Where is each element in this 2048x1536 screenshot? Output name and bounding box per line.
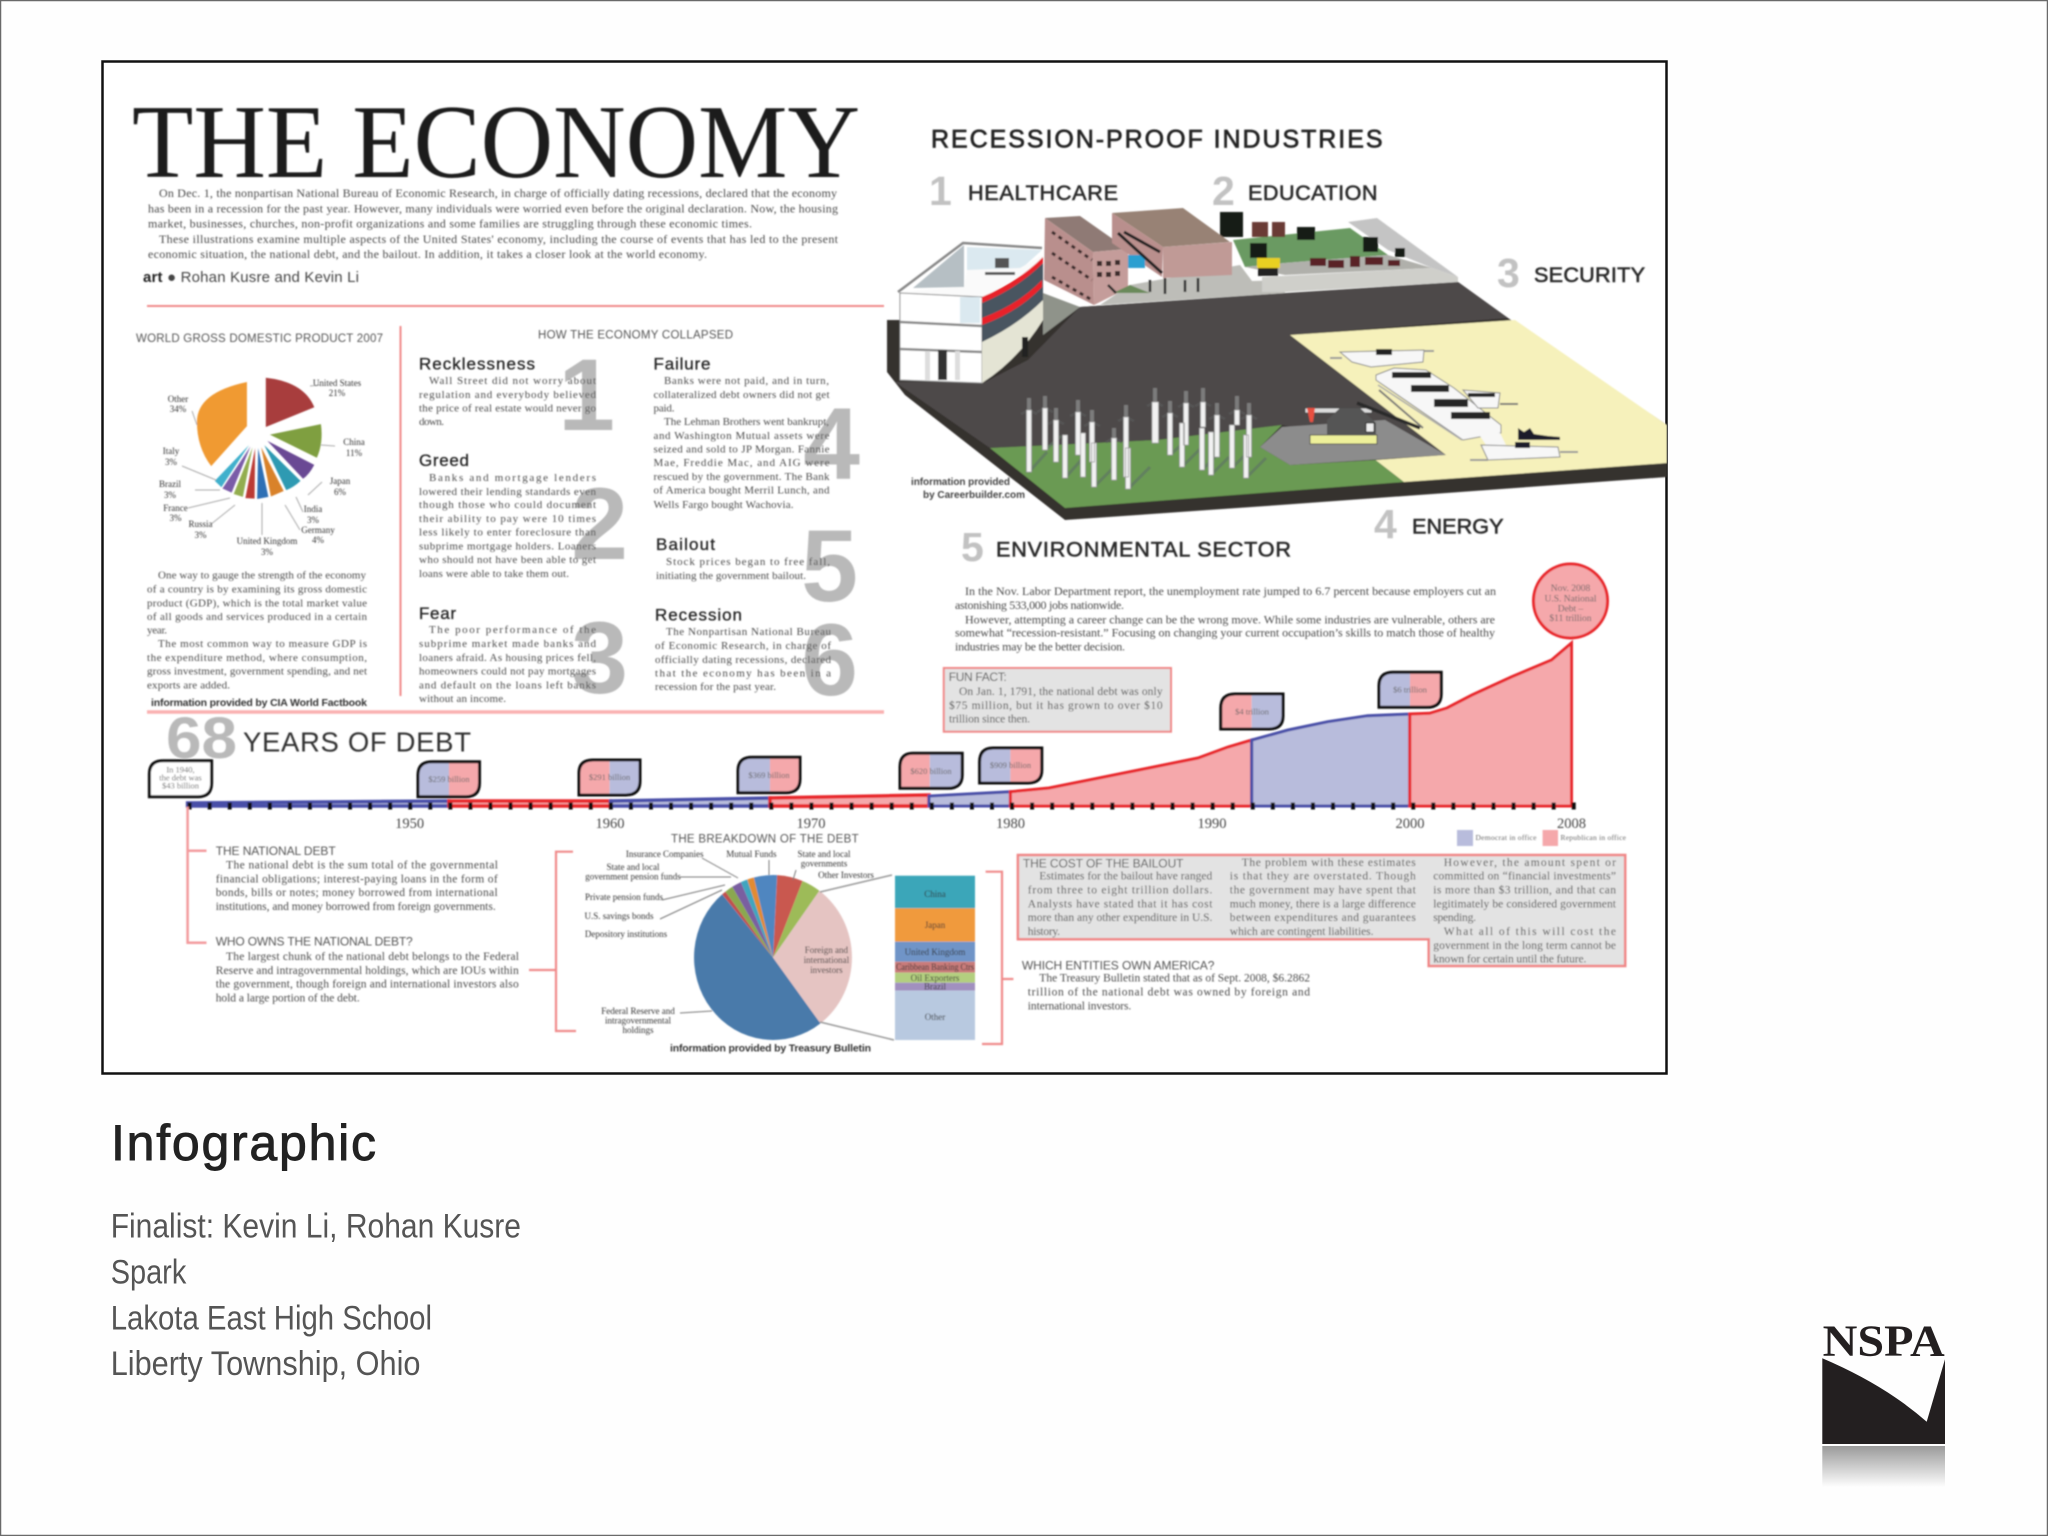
- step 2: greed: subprime mortgage holders. Loaners: [419, 540, 596, 552]
- which entities text: international investors.: [1028, 1000, 1131, 1012]
- callout: 1980: [980, 748, 1042, 783]
- step 2: greed: Banks and mortgage lenders: [429, 472, 596, 484]
- step 4: failure: of America bought Merril Lunch, and: [654, 484, 830, 496]
- bar labels: Caribbean Banking Ctrs: [896, 962, 974, 972]
- pie labels: France: [163, 503, 188, 513]
- bailout box: [1018, 855, 1625, 966]
- step 5: bailout: Stock prices began to free fall,: [666, 556, 830, 568]
- poster frame: [102, 62, 1666, 1074]
- debt pie labels: Mutual Funds: [726, 849, 777, 859]
- debt pie labels: holdings: [622, 1025, 654, 1035]
- large step numbers: [558, 338, 860, 717]
- step 3: fear: and default on the loans left banks: [419, 679, 596, 691]
- bailout column 3: is more than $3 trillion, and that can: [1433, 883, 1616, 896]
- gdp text: of a country is by examining its gross domestic: [147, 583, 367, 595]
- debt pie labels: U.S. savings bonds: [584, 911, 654, 921]
- debt pie wedges: [694, 875, 852, 1040]
- turbine heads: [1021, 402, 1257, 442]
- plaza: [1100, 265, 1285, 305]
- caption credits: Spark: [111, 1253, 187, 1291]
- intro text: These illustrations examine multiple aspects of the United States' economy, including the course of events that has led to the present: [159, 232, 839, 246]
- step 4: failure: [654, 354, 830, 511]
- step 1: recklessness: regulation and everybody believed: [419, 389, 596, 401]
- bar labels: [896, 889, 974, 1022]
- bar labels: United Kingdom: [905, 947, 965, 957]
- label: healthcare: [929, 168, 1118, 214]
- axis years: 1970: [796, 816, 826, 832]
- fun fact box: trillion since then.: [949, 714, 1030, 726]
- heading: 68 years of debt: [166, 706, 471, 771]
- unemployment text: [955, 584, 1496, 654]
- step 3: fear: without an income.: [419, 693, 506, 705]
- national debt text: The national debt is the sum total of the governmental: [226, 859, 498, 871]
- step 4: failure: Banks were not paid, and in turn,: [664, 375, 829, 387]
- step 4: failure: Wells Fargo bought Wachovia.: [654, 499, 794, 511]
- second red band: [770, 795, 929, 806]
- legend: Democrat in office: [1476, 833, 1537, 842]
- pie labels: Germany: [301, 525, 335, 535]
- gdp text: of all goods and services produced in a certain: [147, 611, 368, 623]
- callout: 1976: $620 billion: [910, 766, 952, 776]
- concrete pad: [1260, 420, 1446, 465]
- axis years: 2008: [1557, 816, 1586, 832]
- national debt text: financial obligations; interest-paying loans in the form of: [216, 873, 498, 885]
- which entities text: The Treasury Bulletin stated that as of Sept. 2008, $6.2862: [1039, 972, 1310, 985]
- callout: 1940: In 1940,: [166, 765, 195, 775]
- pie labels: 3%: [194, 530, 207, 540]
- unemployment text: astonishing 533,000 jobs nationwide.: [955, 598, 1124, 612]
- step 6: recession: The Nonpartisan National Bureau: [666, 626, 832, 638]
- caribbean segment: [895, 962, 975, 973]
- other segment: [895, 991, 975, 1040]
- early red band: [449, 801, 611, 806]
- step 2: greed: Greed: [419, 451, 469, 470]
- pie chart: world gdp: [159, 378, 365, 557]
- pie labels: 11%: [346, 448, 363, 458]
- step 2: greed: loans were able to take them out.: [419, 568, 569, 580]
- gdp text: exports are added.: [147, 679, 230, 691]
- terrace path: [1245, 255, 1432, 275]
- pie labels: United States: [313, 378, 362, 388]
- caption credits: Finalist: Kevin Li, Rohan Kusre: [111, 1207, 521, 1245]
- ground block: [887, 282, 1667, 520]
- pie labels: 3%: [164, 490, 176, 500]
- gdp text: gross investment, government spending, and net: [147, 666, 367, 678]
- pie labels: 3%: [261, 547, 274, 557]
- callout: 1952: $259 billion: [428, 774, 470, 784]
- debt timeline chart: [149, 564, 1627, 846]
- debt pie labels: international: [804, 955, 850, 965]
- bailout column 2: much money, there is a large difference: [1230, 898, 1416, 910]
- label: security: [1497, 250, 1645, 296]
- step 3: fear: [419, 604, 596, 705]
- legend: Republican in office: [1560, 833, 1627, 842]
- label: education: EDUCATION: [1248, 180, 1378, 205]
- label: security: SECURITY: [1534, 262, 1645, 287]
- gdp text: product (GDP), which is the total market value: [147, 597, 367, 609]
- who owns the debt text: hold a large portion of the debt.: [216, 993, 360, 1005]
- step 5: bailout: [656, 535, 830, 582]
- pie labels: Italy: [163, 446, 180, 456]
- debt pie labels: Other Investors: [818, 870, 874, 880]
- large step numbers: 3: [571, 601, 628, 715]
- bar labels: China: [924, 889, 946, 899]
- caption heading: Infographic: [111, 1115, 376, 1171]
- bailout column 1: [1028, 870, 1213, 938]
- step 5: bailout: initiating the government bailout.: [656, 570, 806, 582]
- intro text: market, businesses, churches, non-profit organizations and some families are struggling through these economic times.: [148, 216, 752, 230]
- axis years: 2000: [1396, 816, 1424, 832]
- debt pie labels: investors: [810, 965, 843, 975]
- debt pie labels: [584, 849, 874, 1035]
- wind turbines: [1021, 388, 1266, 489]
- pie labels: [159, 378, 365, 557]
- step 2: greed: lowered their lending standards even: [419, 486, 596, 498]
- gdp text: the expenditure method, where consumption,: [147, 652, 367, 664]
- logo reflection: [1822, 1446, 1945, 1487]
- brick building 1: [1044, 216, 1128, 305]
- callout circle: nov 2008: Nov. 2008: [1551, 584, 1590, 594]
- intro text: [148, 186, 839, 261]
- fun fact box: $75 million, but it has grown to over $10: [949, 699, 1163, 712]
- bailout column 3: legitimately be considered government: [1433, 898, 1617, 910]
- step 3: fear: The poor performance of the: [429, 624, 596, 636]
- cream lot: [1290, 320, 1667, 482]
- who owns the debt text: Reserve and intragovernmental holdings, which are IOUs within: [216, 965, 519, 977]
- step 2: greed: their ability to pay were 10 times: [419, 513, 596, 525]
- callout: 1940: the debt was: [159, 772, 202, 782]
- gdp text: [147, 570, 368, 691]
- industry illustration: [887, 208, 1667, 520]
- national debt text: bonds, bills or notes; money borrowed from international: [216, 887, 498, 899]
- step 6: recession: [655, 606, 832, 693]
- right bracket: [982, 872, 1013, 1044]
- who owns the debt text: the government, though foreign and international investors also: [216, 979, 519, 991]
- step 2: greed: [419, 451, 596, 580]
- step 4: failure: seized and sold to JP Morgan. Fannie: [654, 444, 830, 456]
- callout: 1968: [738, 757, 800, 793]
- japan segment: [895, 908, 975, 942]
- pie labels: 21%: [329, 388, 346, 398]
- bailout column 2: is that they are overstated. Though: [1230, 870, 1416, 882]
- callout: 1992: $4 trillion: [1235, 706, 1270, 716]
- callout: 1960: [579, 760, 640, 795]
- bailout heading: THE COST OF THE BAILOUT: [1023, 856, 1184, 870]
- asphalt surface: [895, 282, 1508, 455]
- grass field: [990, 425, 1404, 508]
- bar labels: Japan: [925, 920, 946, 930]
- callout: 1952: [418, 762, 480, 797]
- step 3: fear: Fear: [419, 604, 456, 623]
- step 6: recession: officially dating recessions, declared: [655, 654, 832, 666]
- debt pie labels: Private pension funds: [585, 892, 663, 902]
- axis years: 1960: [596, 816, 624, 832]
- axis years: 1980: [996, 816, 1025, 832]
- label: energy: [1374, 501, 1504, 547]
- bailout column 3: However, the amount spent or: [1444, 857, 1616, 869]
- pie labels: 3%: [170, 513, 182, 523]
- large step numbers: 6: [801, 603, 858, 717]
- callout: 1940: [149, 761, 212, 797]
- label: education: 2: [1212, 168, 1235, 214]
- section dividers: [147, 306, 884, 712]
- callout circle: nov 2008: $11 trillion: [1549, 613, 1592, 624]
- axis years: 1950: [395, 816, 424, 832]
- large step numbers: 1: [558, 338, 615, 452]
- pie leader lines: [182, 385, 335, 535]
- debt pie labels: government pension funds: [585, 871, 681, 881]
- brazil segment: [895, 983, 975, 991]
- legend: [1457, 830, 1627, 846]
- bar labels: Other: [925, 1012, 945, 1022]
- label: healthcare: HEALTHCARE: [968, 180, 1118, 205]
- unemployment text: industries may be the better decision.: [955, 640, 1125, 654]
- which entities text: [1022, 958, 1310, 1012]
- callout circle: nov 2008: U.S. National: [1545, 595, 1597, 605]
- bailout column 1: Estimates for the bailout have ranged: [1039, 870, 1213, 882]
- step 3: fear: homeowners could not pay mortgages: [419, 666, 596, 678]
- unemployment text: However, attempting a career change can be the wrong move. While some industries are vulnerable, others are: [965, 612, 1495, 626]
- bailout column 3: known for certain until the future.: [1433, 953, 1587, 965]
- label: environmental sector: ENVIRONMENTAL SECTOR: [996, 537, 1291, 562]
- callout: 1940: $43 billion: [162, 780, 200, 790]
- title: THE ECONOMY: [132, 83, 860, 200]
- pie labels: Russia: [188, 519, 213, 529]
- bailout column 2: the government may have spent that: [1230, 884, 1417, 896]
- label: healthcare: 1: [929, 168, 952, 214]
- step 2: greed: less likely to enter foreclosure than: [419, 527, 596, 539]
- step 1: recklessness: Wall Street did not worry about: [429, 375, 596, 387]
- bailout column 3: What all of this will cost the: [1444, 926, 1616, 938]
- callout: 1976: [900, 753, 962, 788]
- pie labels: India: [304, 504, 322, 514]
- which entities text: WHICH ENTITIES OWN AMERICA?: [1022, 958, 1215, 972]
- debt pie labels: Foreign and: [805, 945, 849, 955]
- bailout column 3: government in the long term cannot be: [1433, 940, 1616, 952]
- callout: 2000: $6 trillion: [1393, 684, 1428, 694]
- large step numbers: 5: [801, 509, 858, 623]
- callout: 1968: $369 billion: [748, 770, 790, 780]
- bailout column 2: [1230, 857, 1417, 938]
- left bracket: [529, 852, 576, 1031]
- red area 2000-2008: [1410, 643, 1572, 806]
- early blue band: [188, 801, 449, 806]
- step 4: failure: rescued by the government. The Bank: [654, 471, 830, 483]
- fun fact box: [944, 668, 1171, 732]
- step 6: recession: Recession: [655, 606, 742, 625]
- step 6: recession: that the economy has been in a: [655, 668, 831, 680]
- third blue band: [929, 792, 1010, 806]
- school grounds objects: [1220, 212, 1405, 276]
- gdp text: year.: [147, 624, 167, 636]
- caption credits: [111, 1207, 521, 1383]
- source: careerbuilder: by Careerbuilder.com: [923, 490, 1025, 501]
- hospital building: [898, 243, 1080, 383]
- debt pie labels: Insurance Companies: [626, 849, 704, 859]
- callout: 1992: [1221, 694, 1283, 729]
- label: education: [1212, 168, 1378, 214]
- callout circle: nov 2008: [1534, 564, 1608, 638]
- who owns the debt text: WHO OWNS THE NATIONAL DEBT?: [216, 935, 413, 949]
- step 4: failure: Mae, Freddie Mac, and AIG were: [654, 457, 830, 469]
- label: security: 3: [1497, 250, 1520, 296]
- intro text: has been in a recession for the past year. However, many individuals were worried even before the original declaration. Now, the housing: [148, 201, 838, 215]
- source: cia: information provided by CIA World Factbook: [151, 697, 367, 709]
- unemployment text: somewhat “recession-resistant.” Focusing on changing your current occupation’s skills to match those of healthy: [955, 626, 1495, 640]
- label: environmental sector: [961, 524, 1291, 570]
- which entities text: trillion of the national debt was owned by foreign and: [1028, 987, 1310, 999]
- second blue band: [611, 798, 770, 806]
- pie labels: United Kingdom: [237, 536, 297, 546]
- step 6: recession: recession for the past year.: [655, 681, 776, 693]
- poster content: [132, 83, 1667, 1055]
- callout: 2000: [1379, 672, 1441, 707]
- source: careerbuilder: information provided: [911, 477, 1010, 488]
- bailout column 1: Analysts have stated that it has cost: [1028, 898, 1213, 910]
- bailout column 2: The problem with these estimates: [1242, 857, 1416, 869]
- axis years: [395, 816, 1586, 832]
- step 5: bailout: Bailout: [656, 535, 715, 554]
- timeline connector: [188, 807, 206, 943]
- school lawn: [1233, 228, 1388, 267]
- heading: 68 years of debt: YEARS OF DEBT: [243, 727, 471, 758]
- intro text: On Dec. 1, the nonpartisan National Bureau of Economic Research, in charge of officially dating recessions, declared that the economy: [159, 186, 837, 200]
- step 6: recession: of Economic Research, in charge of: [655, 640, 831, 652]
- red area 1980-1992: [1010, 740, 1252, 806]
- pie labels: 34%: [170, 404, 187, 414]
- bailout column 3: spending.: [1433, 912, 1476, 924]
- debt pie labels: intragovernmental: [605, 1016, 671, 1026]
- axis years: 1990: [1198, 816, 1226, 832]
- oil exporters segment: [895, 973, 975, 983]
- bailout column 1: from three to eight trillion dollars.: [1028, 884, 1213, 896]
- pie labels: Japan: [330, 476, 351, 486]
- national debt text: [216, 844, 498, 913]
- pie chart: debt breakdown: [584, 849, 894, 1040]
- heading: recession-proof industries: RECESSION-PROOF INDUSTRIES: [931, 126, 1382, 154]
- national debt text: institutions, and money borrowed from foreign governments.: [216, 901, 496, 913]
- turbine towers: [1026, 402, 1252, 489]
- step 1: recklessness: the price of real estate would never go: [419, 402, 596, 414]
- callout circle: nov 2008: Debt –: [1558, 604, 1584, 614]
- pie labels: 3%: [307, 515, 320, 525]
- blue area 1992-2000: [1252, 714, 1410, 806]
- bailout column 1: history.: [1028, 926, 1060, 938]
- step 3: fear: subprime market made banks and: [419, 638, 596, 650]
- step 1: recklessness: [419, 354, 596, 428]
- step 3: fear: loaners afraid. As housing prices fell,: [419, 652, 596, 664]
- pie labels: China: [343, 437, 365, 447]
- label: energy: ENERGY: [1412, 514, 1504, 538]
- gdp text: The most common way to measure GDP is: [158, 638, 367, 650]
- callout: 1960: $291 billion: [589, 772, 631, 782]
- bailout column 2: which are contingent liabilities.: [1230, 926, 1374, 938]
- step 4: failure: and Washington Mutual assets were: [654, 430, 830, 442]
- poster: the economy: [102, 62, 1667, 1074]
- debt pie labels: governments: [801, 859, 848, 869]
- solar facility: [1330, 349, 1578, 460]
- debt pie labels: State and local: [607, 862, 660, 872]
- pie wedges: [197, 378, 322, 499]
- step 4: failure: Failure: [654, 354, 710, 373]
- step 4: failure: The Lehman Brothers went bankrupt,: [664, 416, 829, 428]
- china segment: [895, 876, 975, 908]
- large step numbers: 4: [803, 387, 860, 501]
- stacked bar: foreign owners: [895, 876, 975, 1040]
- label: environmental sector: 5: [961, 524, 984, 570]
- terrace front strip: [1262, 268, 1458, 292]
- oil pump: [1305, 408, 1377, 444]
- byline: art ● Rohan Kusre and Kevin Li: [143, 269, 359, 286]
- logo wordmark: NSPA: [1823, 1317, 1945, 1366]
- step 2: greed: who should not have been able to get: [419, 554, 596, 566]
- pie labels: 6%: [334, 487, 346, 497]
- logo mark: [1822, 1358, 1945, 1444]
- gdp text: One way to gauge the strength of the economy: [158, 570, 366, 582]
- step 1: recklessness: Recklessness: [419, 354, 535, 373]
- pie labels: 3%: [165, 457, 178, 467]
- heading: world gdp: WORLD GROSS DOMESTIC PRODUCT 2007: [136, 333, 383, 345]
- bar labels: Brazil: [924, 982, 946, 992]
- debt pie labels: State and local: [798, 849, 851, 859]
- caption credits: Lakota East High School: [111, 1299, 432, 1337]
- callout: 1980: $909 billion: [990, 760, 1032, 770]
- fun fact box: FUN FACT:: [949, 670, 1007, 684]
- fun fact box: On Jan. 1, 1791, the national debt was only: [959, 686, 1163, 698]
- who owns the debt text: [216, 935, 519, 1005]
- debt pie labels: Federal Reserve and: [601, 1006, 675, 1016]
- debt pie labels: Depository institutions: [585, 929, 668, 939]
- who owns the debt text: The largest chunk of the national debt belongs to the Federal: [226, 951, 519, 963]
- heading: breakdown of the debt: THE BREAKDOWN OF THE DEBT: [671, 834, 859, 846]
- bailout column 3: committed on “financial investments”: [1433, 870, 1616, 882]
- step 4: failure: collateralized debt owners did not get: [654, 389, 830, 401]
- step 4: failure: paid.: [654, 402, 675, 414]
- terrace wing: [1348, 218, 1458, 277]
- turbine shadows: [1029, 436, 1266, 489]
- debt pie leader lines: [660, 858, 894, 1040]
- axis ticks: [188, 802, 1578, 810]
- caption credits: Liberty Township, Ohio: [111, 1345, 420, 1383]
- step 2: greed: though those who could document: [419, 499, 596, 511]
- heading: how the economy collapsed: HOW THE ECONOMY COLLAPSED: [538, 330, 733, 342]
- pie labels: Brazil: [159, 479, 181, 489]
- brick building 2: [1108, 208, 1232, 294]
- large step numbers: 2: [571, 467, 628, 581]
- source: careerbuilder: [911, 477, 1025, 501]
- label: energy: 4: [1374, 501, 1397, 547]
- national debt text: THE NATIONAL DEBT: [216, 844, 336, 858]
- step 1: recklessness: down.: [419, 416, 444, 428]
- uk segment: [895, 942, 975, 962]
- heading: 68 years of debt: 68: [166, 706, 237, 771]
- pie labels: Other: [168, 394, 188, 404]
- unemployment text: In the Nov. Labor Department report, the unemployment rate jumped to 6.7 percent because employers cut an: [965, 584, 1496, 598]
- nspa logo: [1822, 1317, 1945, 1487]
- bailout column 1: more than any other expenditure in U.S.: [1028, 912, 1213, 924]
- bailout column 3: [1433, 857, 1617, 965]
- bailout column 2: between expenditures and guarantees: [1230, 912, 1416, 924]
- bar labels: Oil Exporters: [911, 973, 960, 983]
- source: treasury: information provided by Treasury Bulletin: [670, 1043, 871, 1055]
- intro text: economic situation, the national debt, and the bailout. In addition, it takes a closer look at the world economy.: [148, 247, 707, 261]
- pie labels: 4%: [312, 535, 324, 545]
